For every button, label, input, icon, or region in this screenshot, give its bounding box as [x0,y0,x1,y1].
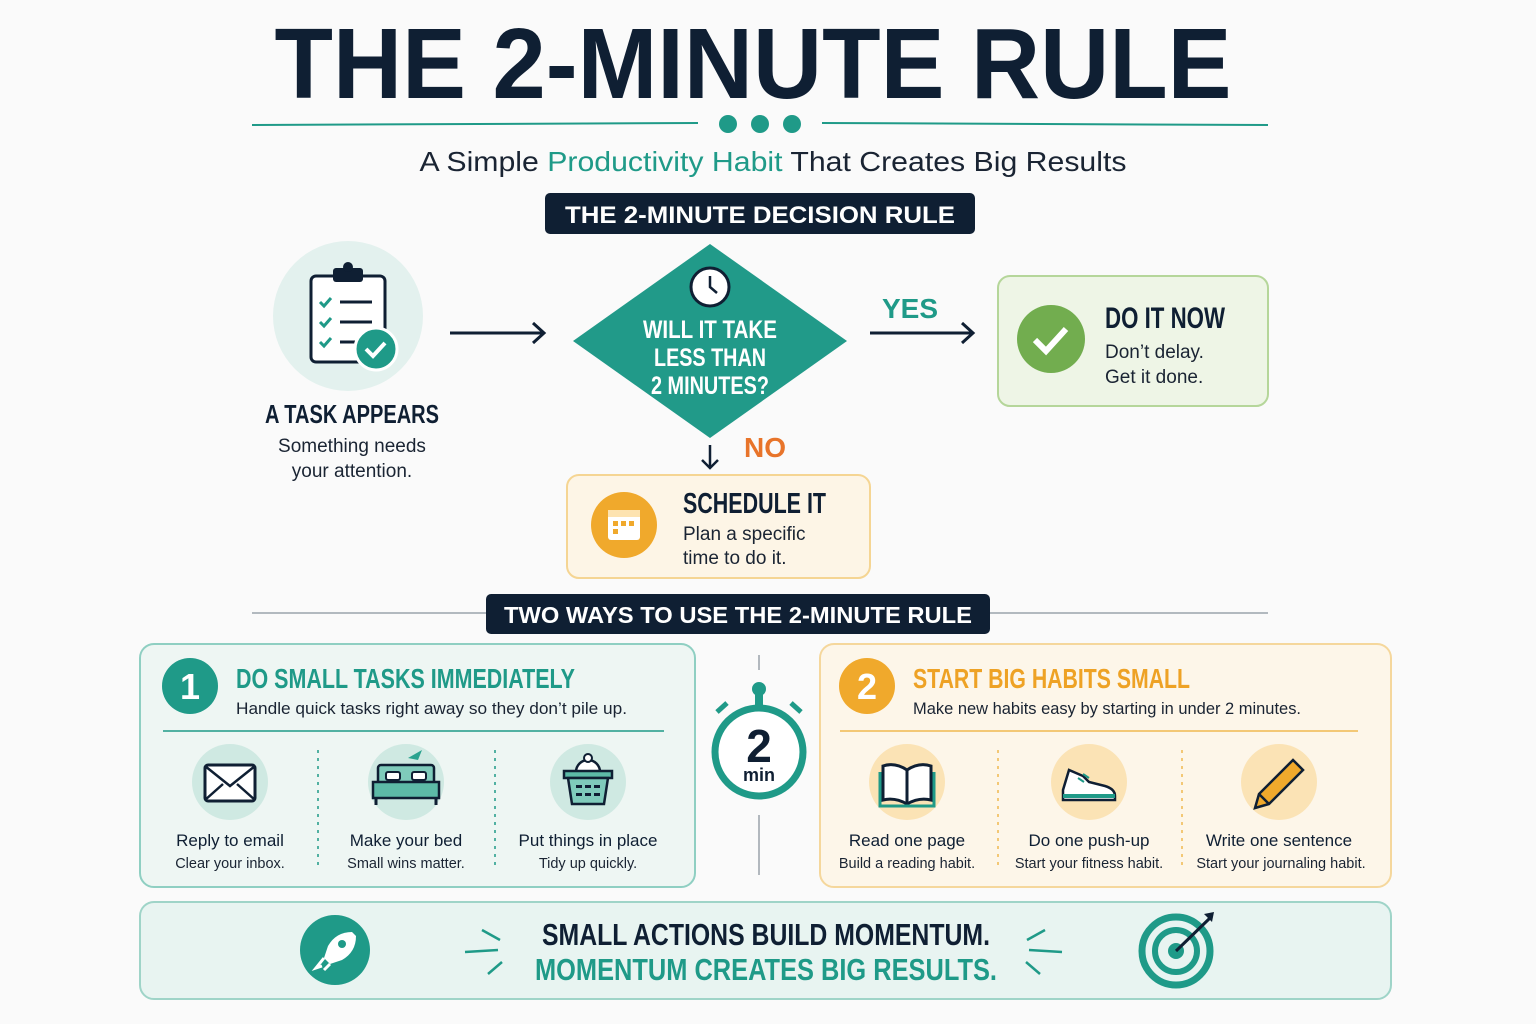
item: pencil: Start your journaling habit. [1196,856,1366,872]
box: do it now: DO IT NOW [1105,302,1226,335]
icon: clock [691,268,729,306]
item: basket: Tidy up quickly. [539,856,637,872]
stopwatch: 2 min: 2 [746,720,772,772]
task appears: Something needs [278,436,426,457]
panel: start big habits small: Make new habits easy by starting in under 2 minutes. [913,699,1301,718]
banner: momentum: SMALL ACTIONS BUILD MOMENTUM. [542,917,990,952]
item: pencil [1196,744,1366,872]
yes label: YES [882,293,938,324]
arrow: to decision [450,323,544,343]
item: pencil: Write one sentence [1206,831,1352,850]
task appears [265,241,439,482]
icon: clipboard [273,241,423,391]
item: email: Clear your inbox. [175,856,285,872]
section label: decision rule: THE 2-MINUTE DECISION RULE [565,202,955,229]
item: bed [347,744,465,872]
task appears: A TASK APPEARS [265,399,439,429]
item: shoe: Do one push-up [1029,831,1149,850]
decorative dots [719,115,801,133]
item: bed: Make your bed [350,831,462,850]
item: basket [519,744,657,872]
panel: do small tasks immediately: 1 [180,666,200,707]
panel: do small tasks immediately [140,644,695,887]
item: book [839,744,975,872]
panel: do small tasks immediately: Handle quick tasks right away so they don’t pile up. [236,699,627,718]
box: schedule it: Plan a specific [683,524,806,545]
title: THE 2-MINUTE RULE [274,8,1232,120]
box: schedule it: SCHEDULE IT [683,488,826,520]
item: book: Build a reading habit. [839,856,975,872]
banner: momentum [140,902,1391,999]
item: email [175,744,285,872]
section label: two ways: TWO WAYS TO USE THE 2-MINUTE RULE [504,602,972,628]
item: shoe [1015,744,1163,872]
arrow: no [702,445,718,468]
icon: target [1142,912,1214,985]
item: shoe: Start your fitness habit. [1015,856,1163,872]
arrow: yes [870,323,973,343]
subtitle: A Simple Productivity Habit That Creates Big Results [420,146,1126,177]
box: do it now: Get it done. [1105,367,1203,388]
icon: rocket [300,915,370,985]
stopwatch: 2 min [715,655,803,875]
decision diamond [573,244,847,438]
decision diamond: WILL IT TAKE [643,316,777,344]
panel: start big habits small: START BIG HABITS SMALL [913,663,1190,694]
panel: do small tasks immediately: DO SMALL TASKS IMMEDIATELY [236,663,575,694]
no label: NO [744,432,786,463]
task appears: your attention. [292,461,412,482]
decision diamond: 2 MINUTES? [651,372,769,400]
decision diamond: LESS THAN [654,344,766,372]
item: book: Read one page [849,831,965,850]
panel: start big habits small: 2 [857,666,877,707]
section label: decision rule [545,193,975,234]
box: schedule it [567,475,870,578]
item: basket: Put things in place [519,831,657,850]
box: do it now: Don’t delay. [1105,342,1204,363]
banner: momentum: MOMENTUM CREATES BIG RESULTS. [535,952,997,987]
panel: start big habits small [820,644,1391,887]
item: bed: Small wins matter. [347,856,465,872]
section label: two ways [486,594,990,634]
item: email: Reply to email [176,831,284,850]
box: schedule it: time to do it. [683,548,786,569]
box: do it now [998,276,1268,406]
stopwatch: 2 min: min [743,765,775,785]
